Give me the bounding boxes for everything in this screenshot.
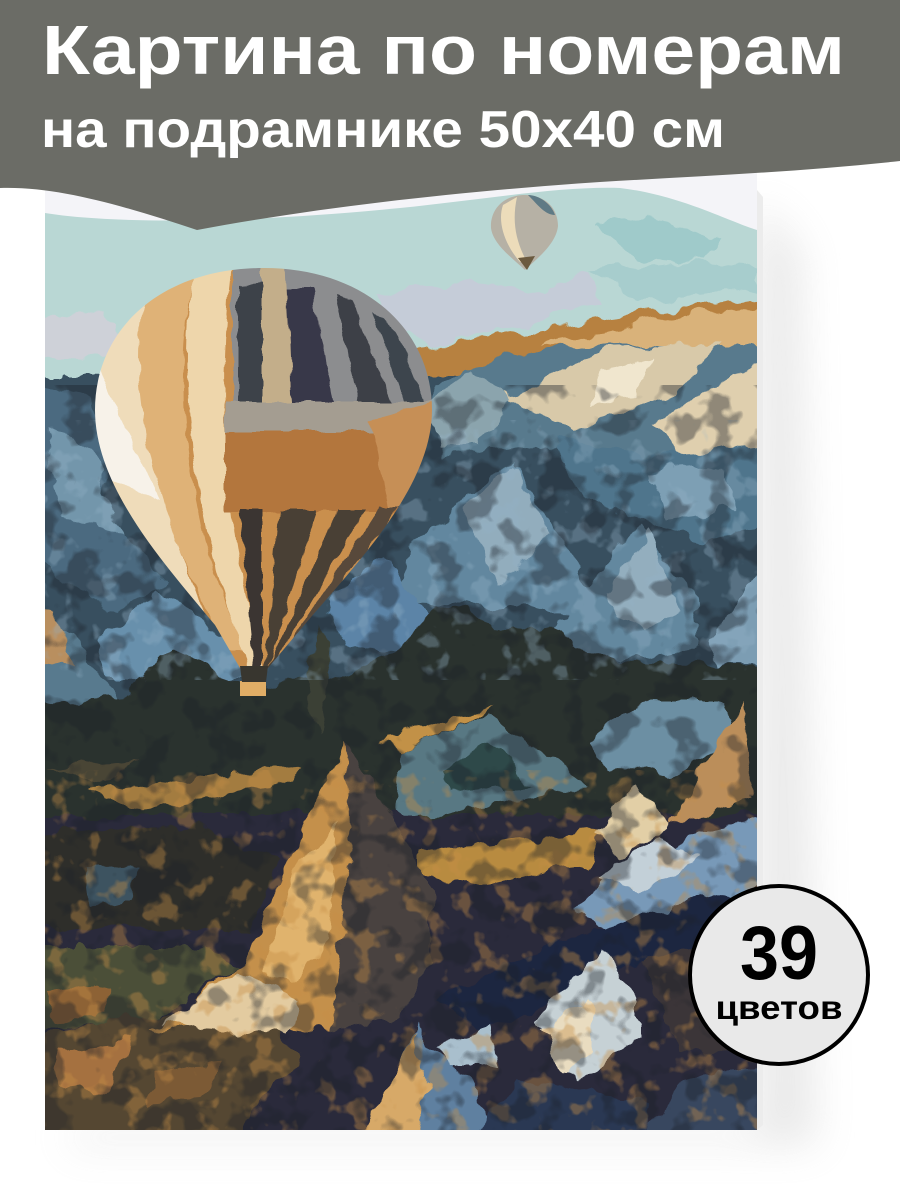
painting: hot air balloons over Cappadocia	[20, 170, 790, 1150]
large balloon	[95, 268, 432, 696]
badge: 39 colours: цветов	[716, 989, 842, 1026]
lower valley	[45, 808, 757, 1130]
subtitle: на подрамнике 50х40 см	[41, 101, 725, 159]
lower stripes	[240, 510, 262, 668]
golden ridge	[417, 300, 757, 378]
sunlit rocks lower right	[420, 830, 600, 885]
small balloon	[491, 195, 558, 270]
paint texture: golden blotches	[45, 770, 757, 1130]
basket	[240, 681, 266, 696]
header banner	[0, 0, 900, 230]
foreground rock spire	[329, 741, 436, 1032]
lit left gores	[100, 305, 205, 613]
dark valley	[45, 604, 757, 822]
sky	[45, 173, 757, 224]
mountain and clouds	[45, 188, 757, 400]
canvas side edge	[757, 190, 763, 1130]
mid rock field blue	[45, 373, 757, 700]
terrain group	[20, 218, 790, 1150]
cypress	[306, 626, 330, 734]
badge: 39 colours	[690, 886, 868, 1064]
badge: 39 colours: 39	[740, 911, 818, 996]
paint texture: dark blotches	[45, 385, 757, 1130]
title: Картина по номерам	[42, 11, 845, 89]
mid band	[225, 402, 450, 436]
paint texture: light blue blotches	[45, 420, 757, 680]
canvas drop shadow	[70, 200, 815, 1145]
crown stripes	[230, 268, 432, 404]
